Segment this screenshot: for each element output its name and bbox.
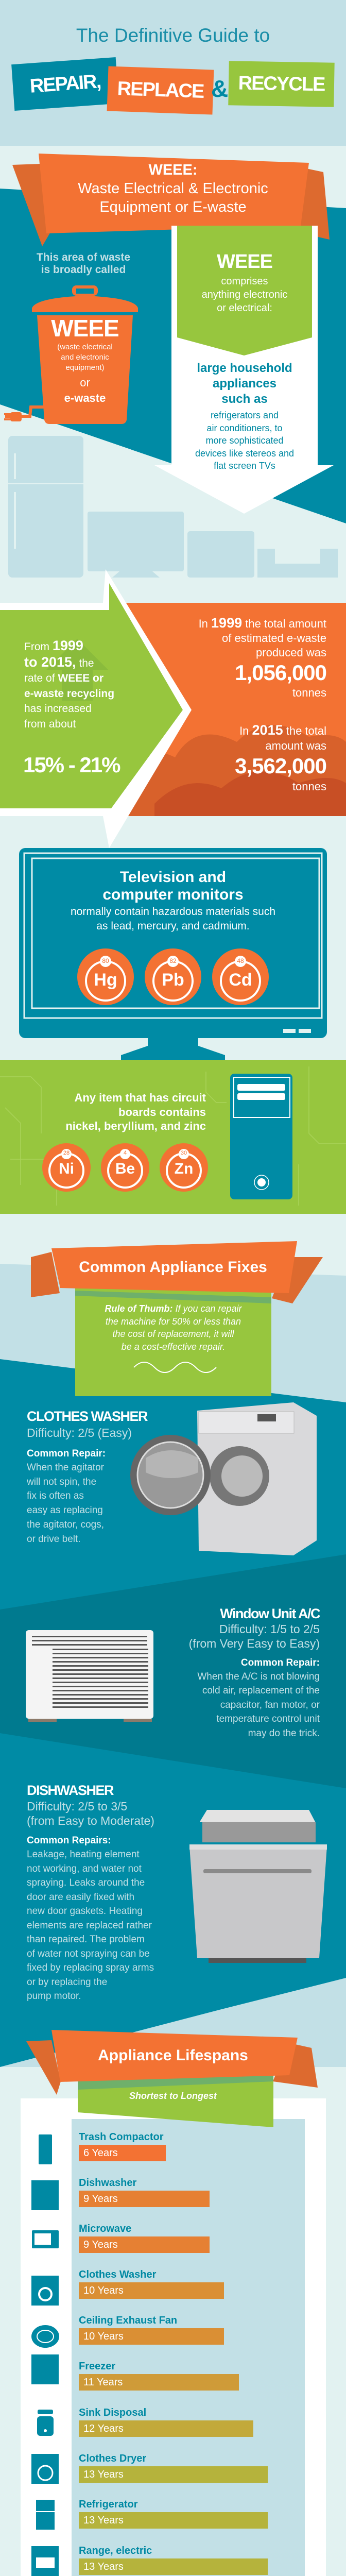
ribbon: weee: [12, 154, 330, 246]
chart labels: lifespans: 10 Years: [83, 2285, 124, 2296]
labels: element symbols hg pb cd: [94, 957, 252, 990]
text: weee comprises: comprises: [221, 276, 268, 287]
text: rule of thumb: [105, 1303, 242, 1352]
ribbon: common appliance fixes: [31, 1241, 323, 1396]
text: rule of thumb: the machine for 50% or less than: [106, 1316, 241, 1327]
text: dishwasher: DISHWASHER: [27, 1783, 113, 1798]
ribbon text: weee definition: Equipment or E-waste: [99, 199, 247, 215]
text: 2015 total: In 2015 the total: [239, 722, 326, 738]
chart labels: lifespans: [79, 2131, 177, 2572]
text: large household appliances: refrigerators and: [211, 410, 279, 420]
text: 2015 total: tonnes: [292, 780, 326, 793]
text: 1999 total: 1,056,000: [235, 660, 326, 685]
text: dishwasher: spraying. Leaks around the: [27, 1877, 145, 1888]
text: recycling rate: has increased: [24, 703, 92, 715]
text: broadly called: This area of waste: [37, 251, 130, 263]
text: recycling rate: rate of WEEE or: [24, 672, 103, 684]
text: large household appliances: flat screen TVs: [214, 461, 275, 471]
icon: dishwasher: [189, 1810, 327, 1963]
icon: window ac: [26, 1630, 153, 1722]
text: window unit ac: [189, 1606, 320, 1739]
text: tv monitors hazards: as lead, mercury, and cadmium.: [96, 920, 250, 932]
text: large household appliances: appliances: [213, 377, 276, 391]
banner: replace: [107, 66, 214, 115]
bar chart: lifespans: [79, 2145, 297, 2576]
chart labels: lifespans: Clothes Washer: [79, 2269, 156, 2280]
icon: trash can: [4, 285, 138, 424]
chart labels: lifespans: Dishwasher: [79, 2177, 136, 2189]
text: dishwasher: door are easily fixed with: [27, 1892, 134, 1902]
text: tv monitors hazards: normally contain hazardous materials such: [71, 906, 275, 918]
text: window unit ac: Difficulty: 1/5 to 2/5: [219, 1622, 320, 1636]
chart labels: lifespans: Trash Compactor: [79, 2131, 163, 2143]
chart labels: lifespans: 13 Years: [83, 2561, 124, 2572]
labels: element symbols ni be zn: Be: [115, 1160, 135, 1177]
labels: element symbols ni be zn: [59, 1150, 193, 1177]
chart labels: lifespans: 12 Years: [83, 2423, 124, 2434]
text: clothes washer: the agitator, cogs,: [27, 1519, 104, 1530]
text: large household appliances: air conditioners, to: [206, 422, 283, 433]
panel: lifespans backgrounds: [21, 2098, 326, 2576]
text: dishwasher: [27, 1783, 154, 2002]
chart labels: lifespans: Range, electric: [79, 2545, 152, 2556]
banner: recycle: [228, 61, 335, 107]
text: weee comprises: or electrical:: [217, 302, 272, 314]
text: tv monitors hazards: [71, 869, 275, 932]
text: large household appliances: devices like stereos and: [195, 448, 294, 459]
text: window unit ac: may do the trick.: [248, 1728, 320, 1739]
icon: monitor: [19, 848, 327, 1060]
text: dishwasher: new door gaskets. Heating: [27, 1906, 143, 1917]
text: 2015 total: amount was: [265, 739, 326, 752]
labels: element symbols hg pb cd: Hg: [94, 970, 117, 990]
text: trash can label: (waste electrical: [57, 343, 113, 351]
text: circuit boards: boards contains: [118, 1106, 206, 1118]
icon: element circles hg pb cd: [77, 948, 269, 1005]
text: dishwasher: of water not spraying can be: [27, 1948, 150, 1959]
text: rule of thumb: the cost of replacement, it will: [112, 1329, 234, 1339]
stat: 15-21%: 15% - 21%: [23, 753, 119, 777]
labels: element symbols ni be zn: 30: [181, 1150, 187, 1156]
text: dishwasher: or by replacing the: [27, 1976, 107, 1988]
text: 2015 total: [235, 722, 326, 793]
icon: washing machine: [130, 1402, 317, 1555]
text: broadly called: is broadly called: [41, 264, 126, 276]
chart labels: lifespans: Microwave: [79, 2223, 131, 2234]
text: tv monitors hazards: computer monitors: [102, 886, 244, 903]
labels: element symbols ni be zn: 28: [63, 1150, 70, 1156]
text: clothes washer: fix is often as: [27, 1490, 84, 1501]
text: weee comprises: [202, 251, 287, 314]
text: window unit ac: Common Repair:: [241, 1657, 320, 1668]
text: clothes washer: [27, 1409, 148, 1545]
text: dishwasher: Difficulty: 2/5 to 3/5: [27, 1800, 127, 1813]
text: window unit ac: When the A/C is not blowing: [197, 1671, 320, 1682]
chart labels: lifespans: Sink Disposal: [79, 2407, 146, 2418]
text: trash can label: WEEE: [51, 315, 119, 342]
chart labels: lifespans: 9 Years: [83, 2239, 118, 2250]
chart labels: lifespans: Refrigerator: [79, 2499, 137, 2510]
text: recycling rate: From 1999: [24, 638, 83, 653]
text: broadly called: [37, 251, 130, 276]
labels: element symbols hg pb cd: 48: [237, 957, 244, 964]
text: clothes washer: easy as replacing: [27, 1505, 103, 1516]
chart labels: lifespans: 11 Years: [83, 2377, 123, 2388]
text: large household appliances: large household: [197, 361, 292, 375]
banner: replace: REPLACE: [117, 78, 204, 103]
chart labels: lifespans: 6 Years: [83, 2147, 118, 2159]
text: dishwasher: (from Easy to Moderate): [27, 1814, 154, 1827]
text: clothes washer: or drive belt.: [27, 1534, 81, 1545]
ribbon: appliance lifespans: [26, 2030, 318, 2127]
chart labels: lifespans: Freezer: [79, 2361, 115, 2372]
text: rule of thumb: Rule of Thumb: If you can repair: [105, 1303, 242, 1314]
text: 1999 total: tonnes: [292, 686, 326, 699]
text: trash can label: [51, 315, 119, 404]
heading: common appliance fixes: Common Appliance Fixes: [79, 1259, 267, 1276]
text: large household appliances: such as: [221, 392, 268, 406]
text: recycling rate: [24, 638, 114, 730]
text: window unit ac: Window Unit A/C: [220, 1606, 320, 1621]
chart labels: lifespans: Ceiling Exhaust Fan: [79, 2315, 177, 2326]
text: clothes washer: Common Repair:: [27, 1448, 106, 1459]
icon: computer tower: [230, 1074, 292, 1199]
text: window unit ac: cold air, replacement of the: [202, 1685, 320, 1696]
text: trash can label: and electronic: [61, 353, 109, 362]
labels: element symbols ni be zn: 4: [124, 1150, 127, 1156]
title banners: [11, 57, 335, 114]
text: dishwasher: fixed by replacing spray arms: [27, 1962, 154, 1973]
labels: element symbols hg pb cd: 80: [102, 957, 109, 964]
chart labels: lifespans: 9 Years: [83, 2193, 118, 2205]
ribbon text: weee definition: [78, 162, 268, 215]
text: recycling rate: to 2015, the: [24, 654, 94, 670]
text: 1999 total: of estimated e-waste: [222, 632, 326, 645]
text: clothes washer: CLOTHES WASHER: [27, 1409, 147, 1424]
text: trash can label: equipment): [65, 363, 105, 372]
chart labels: lifespans: 10 Years: [83, 2331, 124, 2342]
text: dishwasher: elements are replaced rather: [27, 1920, 152, 1931]
text: dishwasher: Common Repairs:: [27, 1835, 111, 1846]
text: tv monitors hazards: Television and: [120, 869, 226, 886]
panel: circuit band: [0, 1060, 346, 1214]
text: recycling rate: e-waste recycling: [24, 687, 114, 700]
text: clothes washer: Difficulty: 2/5 (Easy): [27, 1426, 132, 1439]
panel: weee teal background: [0, 189, 346, 523]
text: dishwasher: pump motor.: [27, 1991, 81, 2002]
white arrow: weee comprises: [154, 226, 334, 514]
icon: appliance silhouettes: [8, 436, 338, 578]
panel: fixes backgrounds: [0, 1264, 346, 2067]
chart labels: lifespans: 13 Years: [83, 2515, 124, 2526]
text: rule of thumb: be a cost-effective repair.: [122, 1342, 225, 1352]
subheading: shortest to longest: Shortest to Longest: [129, 2091, 217, 2101]
labels: element symbols hg pb cd: 82: [169, 957, 177, 964]
text: clothes washer: When the agitator: [27, 1462, 104, 1473]
text: window unit ac: (from Very Easy to Easy): [189, 1636, 320, 1650]
text: recycling rate: from about: [24, 718, 76, 730]
text: 1999 total: [199, 615, 326, 699]
banner: repair: [11, 57, 119, 111]
text: window unit ac: temperature control unit: [216, 1714, 320, 1724]
text: circuit boards: [65, 1091, 206, 1132]
text: window unit ac: capacitor, fan motor, or: [220, 1700, 320, 1710]
text: 1999 total: In 1999 the total amount: [199, 615, 326, 631]
ribbon text: weee definition: WEEE:: [148, 162, 198, 178]
text: dishwasher: Leakage, heating element: [27, 1849, 140, 1860]
text: dishwasher: than repaired. The problem: [27, 1934, 145, 1945]
text: large household appliances: [195, 361, 294, 471]
text: 1999 total: produced was: [256, 646, 326, 659]
chart labels: lifespans: Clothes Dryer: [79, 2453, 146, 2464]
chart labels: lifespans: 13 Years: [83, 2469, 124, 2480]
heading: appliance lifespans: Appliance Lifespans: [98, 2047, 248, 2064]
labels: element symbols hg pb cd: Cd: [229, 970, 252, 990]
text: trash can label: e-waste: [64, 392, 106, 404]
text: weee comprises: WEEE: [217, 251, 272, 273]
banner: recycle: RECYCLE: [238, 73, 325, 95]
banner: repair: REPAIR,: [29, 71, 101, 97]
ampersand: &: [211, 75, 228, 102]
text: circuit boards: Any item that has circuit: [74, 1091, 206, 1104]
text: trash can label: or: [80, 376, 90, 389]
text: weee comprises: anything electronic: [202, 289, 287, 300]
labels: element symbols ni be zn: Ni: [59, 1160, 74, 1177]
labels: element symbols hg pb cd: Pb: [162, 970, 184, 990]
title: The Definitive Guide to: [76, 25, 270, 46]
text: dishwasher: not working, and water not: [27, 1863, 142, 1874]
text: 2015 total: 3,562,000: [235, 754, 326, 778]
icons: appliance lifespan icons: [31, 2134, 59, 2576]
ribbon text: weee definition: Waste Electrical & Electronic: [78, 180, 268, 197]
text: circuit boards: nickel, beryllium, and zinc: [65, 1120, 206, 1132]
panel: recycling stats shapes: [0, 569, 346, 848]
labels: element symbols ni be zn: Zn: [175, 1160, 193, 1177]
text: clothes washer: will not spin, the: [27, 1477, 96, 1487]
text: large household appliances: more sophisticated: [205, 435, 284, 446]
